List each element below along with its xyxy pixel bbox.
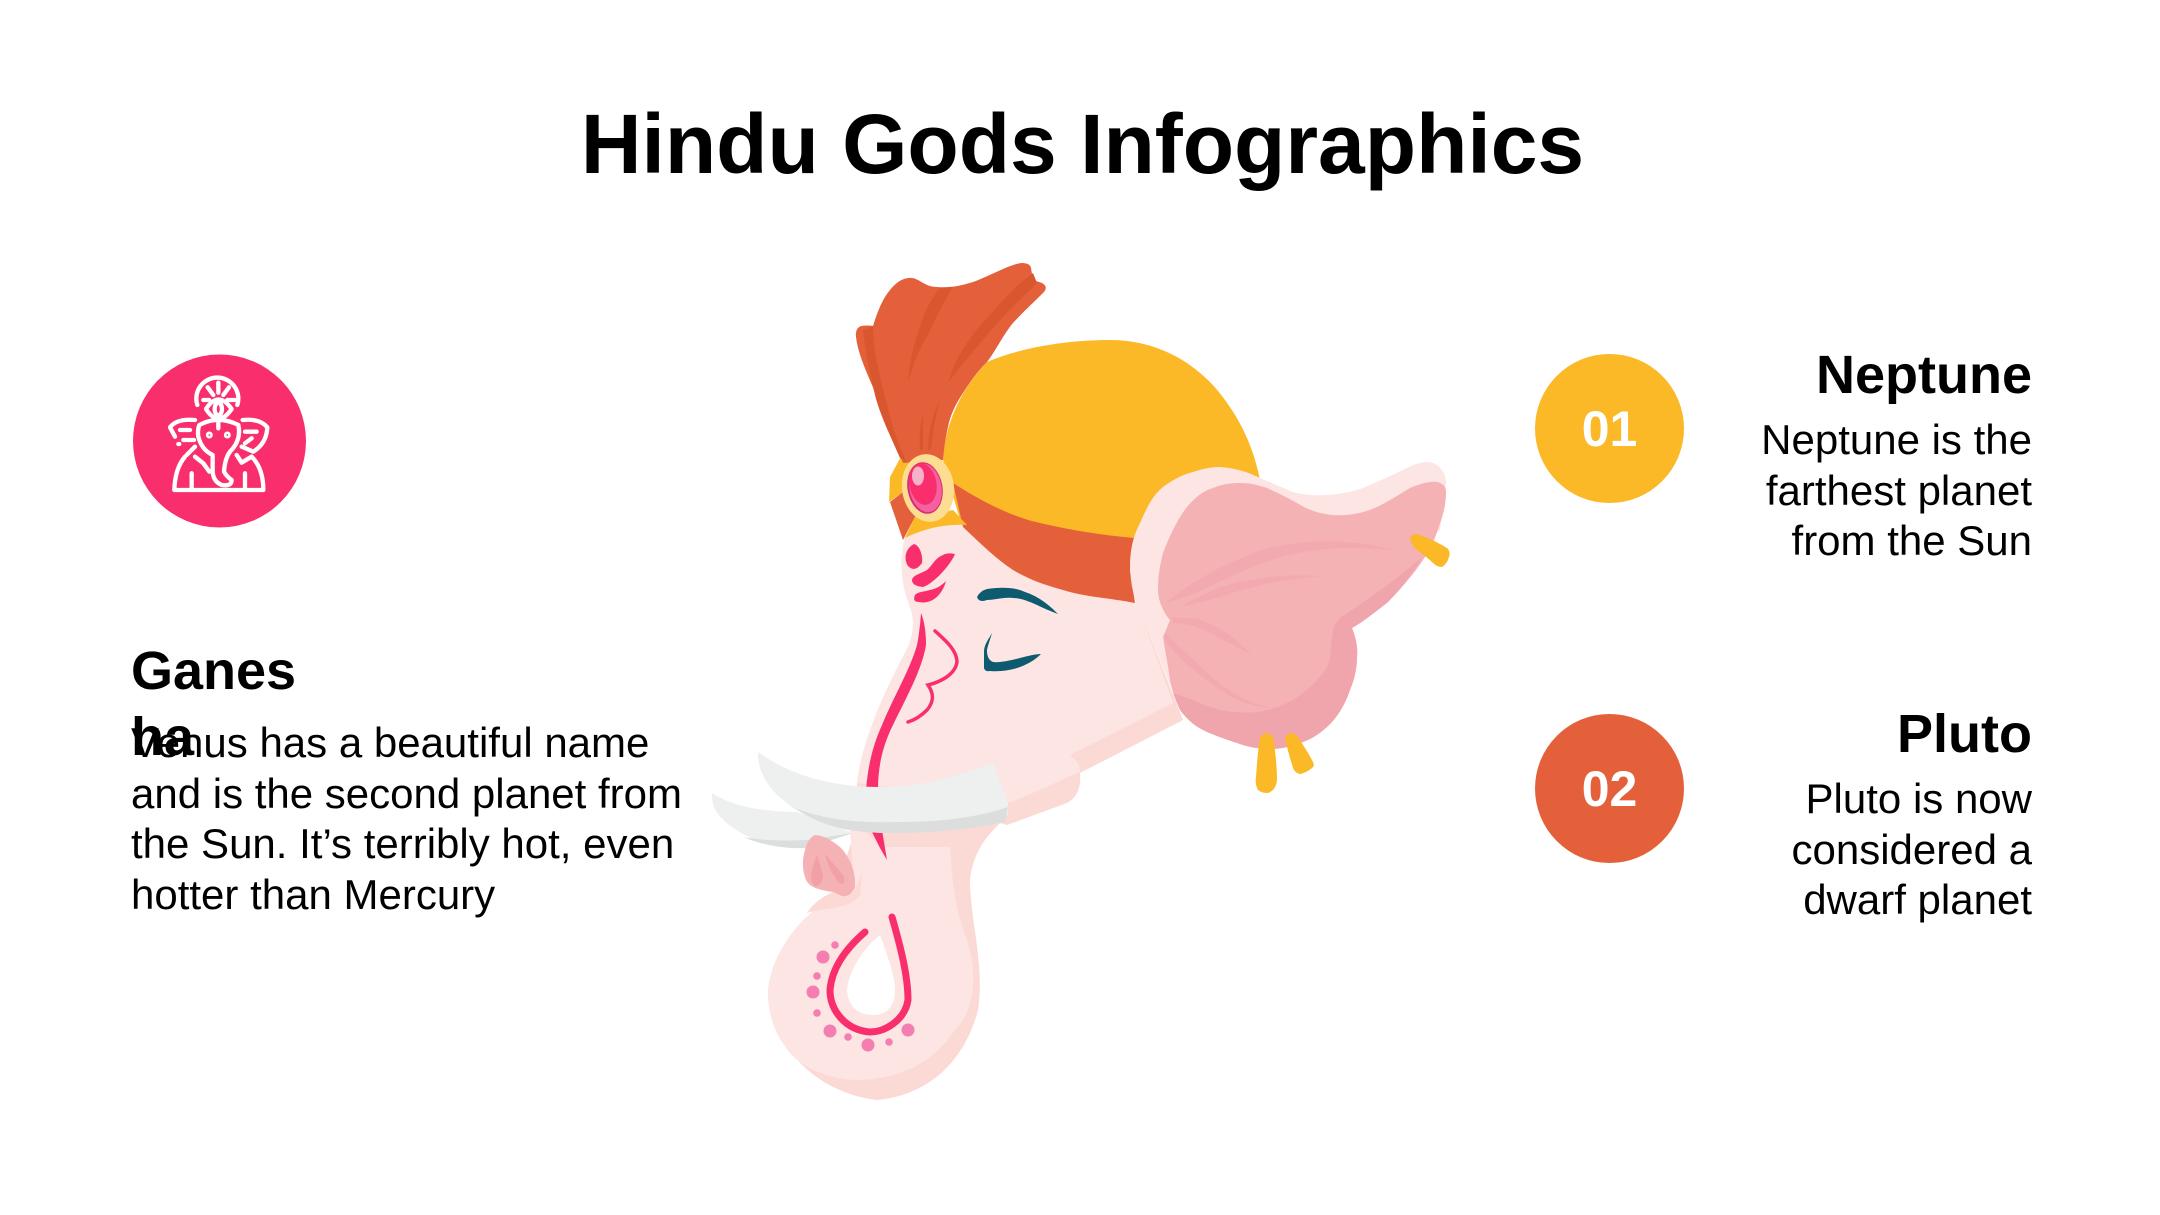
rear tusk xyxy=(712,793,853,848)
text: Ganesha description xyxy=(131,719,682,918)
front tusk xyxy=(758,752,1008,833)
earrings xyxy=(1256,534,1450,793)
badge: 02: 02 xyxy=(1582,761,1637,817)
tilak xyxy=(906,544,955,602)
trunk shading xyxy=(807,832,950,913)
turban band xyxy=(953,483,1135,603)
text: Ganesha description: the Sun. It’s terribly hot, even xyxy=(131,820,674,867)
title: Hindu Gods Infographics xyxy=(581,97,1584,191)
heading: Ganesha xyxy=(131,641,296,767)
badge: 01 xyxy=(1535,354,1684,503)
ear xyxy=(1130,462,1446,710)
heading: Ganesha: ha xyxy=(131,707,194,767)
text: Ganesha description: Venus has a beautiful name xyxy=(131,719,649,766)
text: Neptune description: from the Sun xyxy=(1792,517,2032,564)
heading: Neptune: Neptune xyxy=(1816,345,2032,405)
trunk stripe xyxy=(866,613,926,790)
text: Pluto description: considered a xyxy=(1792,826,2032,873)
trunk loop hole xyxy=(847,935,895,1015)
text: Neptune description: Neptune is the xyxy=(1761,416,2032,463)
nostril xyxy=(803,835,855,896)
turban xyxy=(943,340,1262,560)
dots xyxy=(806,941,914,1052)
text: Pluto description: Pluto is now xyxy=(1806,775,2032,822)
ear folds xyxy=(1165,541,1392,708)
text: Neptune description: farthest planet xyxy=(1766,467,2032,514)
text: Pluto description: dwarf planet xyxy=(1803,876,2032,923)
feather xyxy=(856,263,1046,463)
text: Pluto description xyxy=(1792,775,2032,923)
badge: 01: 01 xyxy=(1582,401,1637,457)
text: Neptune description xyxy=(1761,416,2032,564)
ear shading xyxy=(1173,557,1422,749)
heading: Pluto: Pluto xyxy=(1897,704,2032,764)
badge: 02 xyxy=(1535,714,1684,863)
cheek curl xyxy=(908,631,957,722)
heading: Ganesha: Ganes xyxy=(131,641,296,701)
gem xyxy=(898,451,958,525)
face base xyxy=(768,525,1183,1100)
text: Ganesha description: hotter than Mercury xyxy=(131,871,495,918)
eyebrow xyxy=(977,588,1058,614)
text: Ganesha description: and is the second planet from xyxy=(131,770,682,817)
closed eye xyxy=(984,633,1041,671)
